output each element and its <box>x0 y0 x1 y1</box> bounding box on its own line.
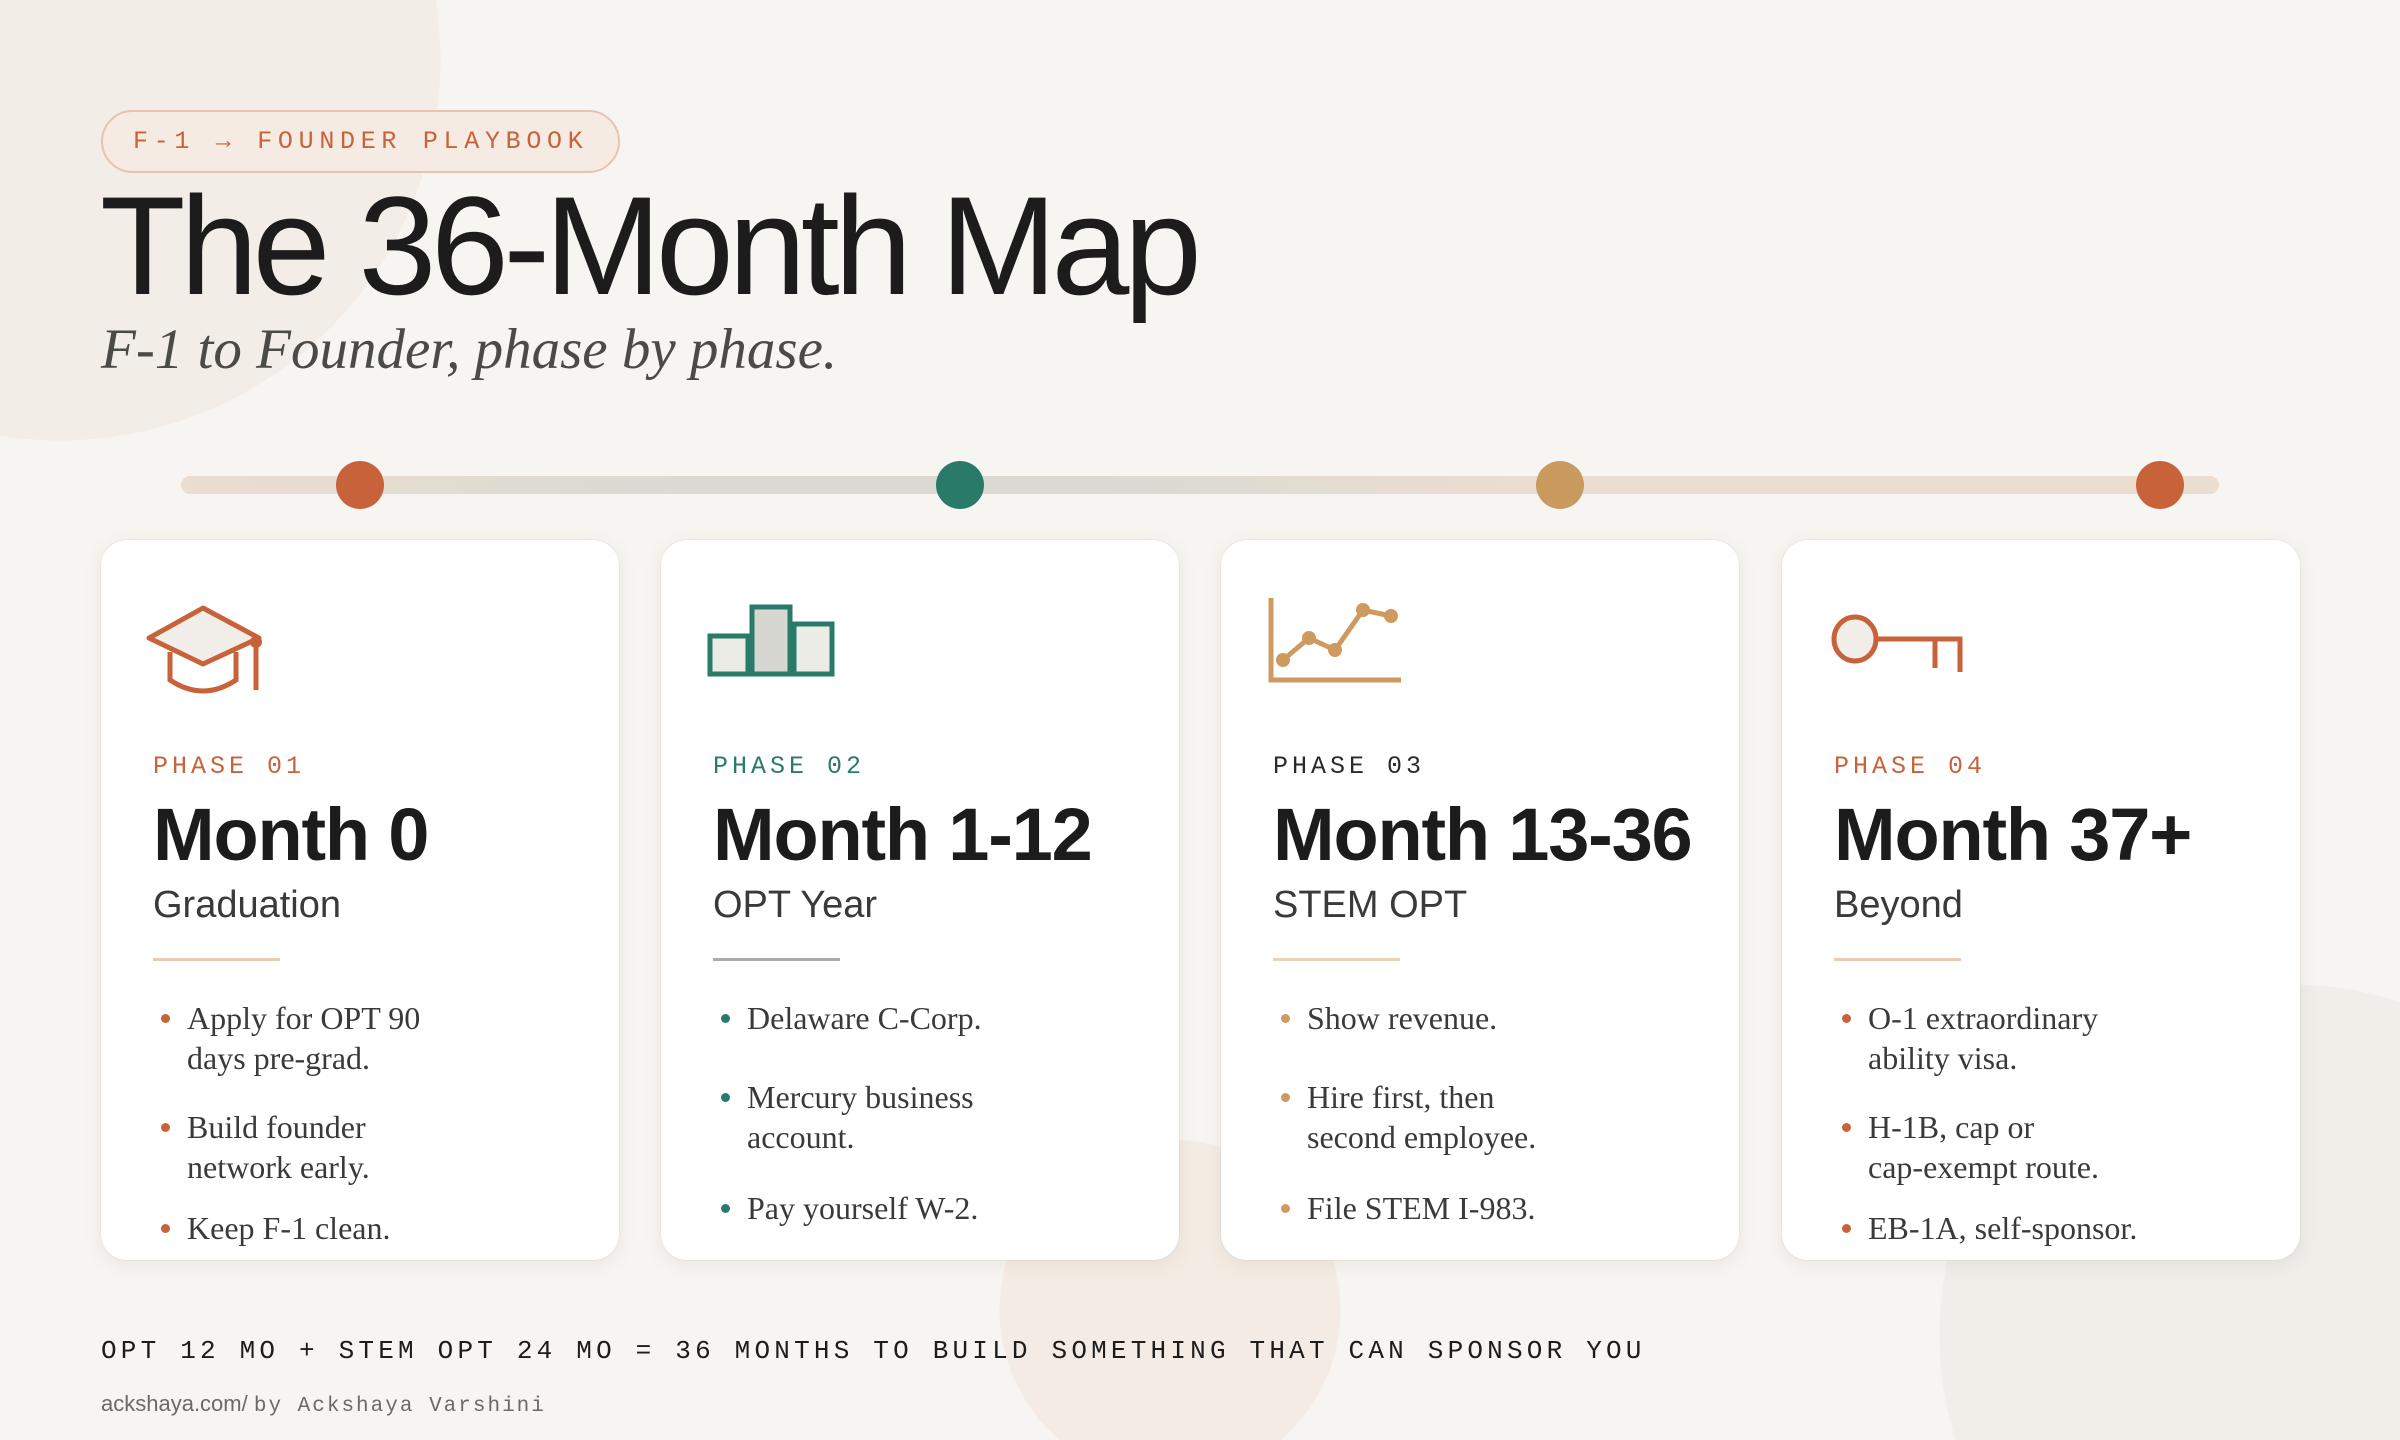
bullet <box>721 1079 974 1155</box>
label: PHASE 01 <box>153 752 305 781</box>
icon: bar chart <box>708 604 834 676</box>
dot phase 2 <box>936 461 984 509</box>
bullet: File STEM I-983. <box>1307 1190 1535 1226</box>
icon: graduation cap <box>146 606 262 694</box>
bullet: O-1 extraordinary <box>1868 1000 2098 1036</box>
title: The 36-Month Map <box>100 167 1196 324</box>
heading: Month 0 <box>153 793 428 876</box>
bullet: Hire first, then <box>1307 1079 1494 1115</box>
icon: key <box>1832 614 1962 672</box>
panel: phase 04 <box>1782 540 2300 1260</box>
heading: Month 13-36 <box>1273 793 1692 876</box>
subheading: STEM OPT <box>1273 884 1467 926</box>
bullet: days pre-grad. <box>187 1040 370 1076</box>
subheading: Graduation <box>153 884 341 926</box>
subheading: OPT Year <box>713 884 877 926</box>
bullet: Show revenue. <box>1307 1000 1497 1036</box>
bullet: Keep F-1 clean. <box>187 1210 390 1246</box>
bullet: ability visa. <box>1868 1040 2017 1076</box>
bullet <box>1281 1079 1536 1155</box>
credit: ackshaya.com/ by Ackshaya Varshini <box>101 1391 546 1418</box>
label: PHASE 04 <box>1834 752 1986 781</box>
bullet: network early. <box>187 1149 370 1185</box>
bullet: H-1B, cap or <box>1868 1109 2034 1145</box>
bullet: second employee. <box>1307 1119 1536 1155</box>
bullet <box>1842 1109 2099 1185</box>
bullet <box>1842 1000 2098 1076</box>
tag pill: F-1 → FOUNDER PLAYBOOK <box>133 127 588 156</box>
panel: phase 01 <box>101 540 619 1260</box>
bullet: Mercury business <box>747 1079 974 1115</box>
panel: phase 03 <box>1221 540 1739 1260</box>
bullet: Delaware C-Corp. <box>747 1000 982 1036</box>
bullet: cap-exempt route. <box>1868 1149 2099 1185</box>
label: PHASE 03 <box>1273 752 1425 781</box>
bullet <box>161 1109 370 1185</box>
footer equation: OPT 12 MO + STEM OPT 24 MO = 36 MONTHS TO BUILD SOMETHING THAT CAN SPONSOR YOU <box>101 1336 1646 1366</box>
bullet: Apply for OPT 90 <box>187 1000 420 1036</box>
bullet: Pay yourself W-2. <box>747 1190 978 1226</box>
dot phase 1 <box>336 461 384 509</box>
bullet: EB-1A, self-sponsor. <box>1868 1210 2137 1246</box>
subheading: Beyond <box>1834 884 1963 926</box>
subtitle: F-1 to Founder, phase by phase. <box>101 318 837 381</box>
bullet <box>161 1000 420 1076</box>
tag pill <box>101 110 620 173</box>
label: PHASE 02 <box>713 752 865 781</box>
dot phase 3 <box>1536 461 1584 509</box>
heading: Month 37+ <box>1834 793 2191 876</box>
panel: phase 02 <box>661 540 1179 1260</box>
bullet: account. <box>747 1119 854 1155</box>
heading: Month 1-12 <box>713 793 1092 876</box>
icon: line chart <box>1268 598 1401 682</box>
timeline <box>181 461 2219 509</box>
dot phase 4 <box>2136 461 2184 509</box>
bullet: Build founder <box>187 1109 366 1145</box>
